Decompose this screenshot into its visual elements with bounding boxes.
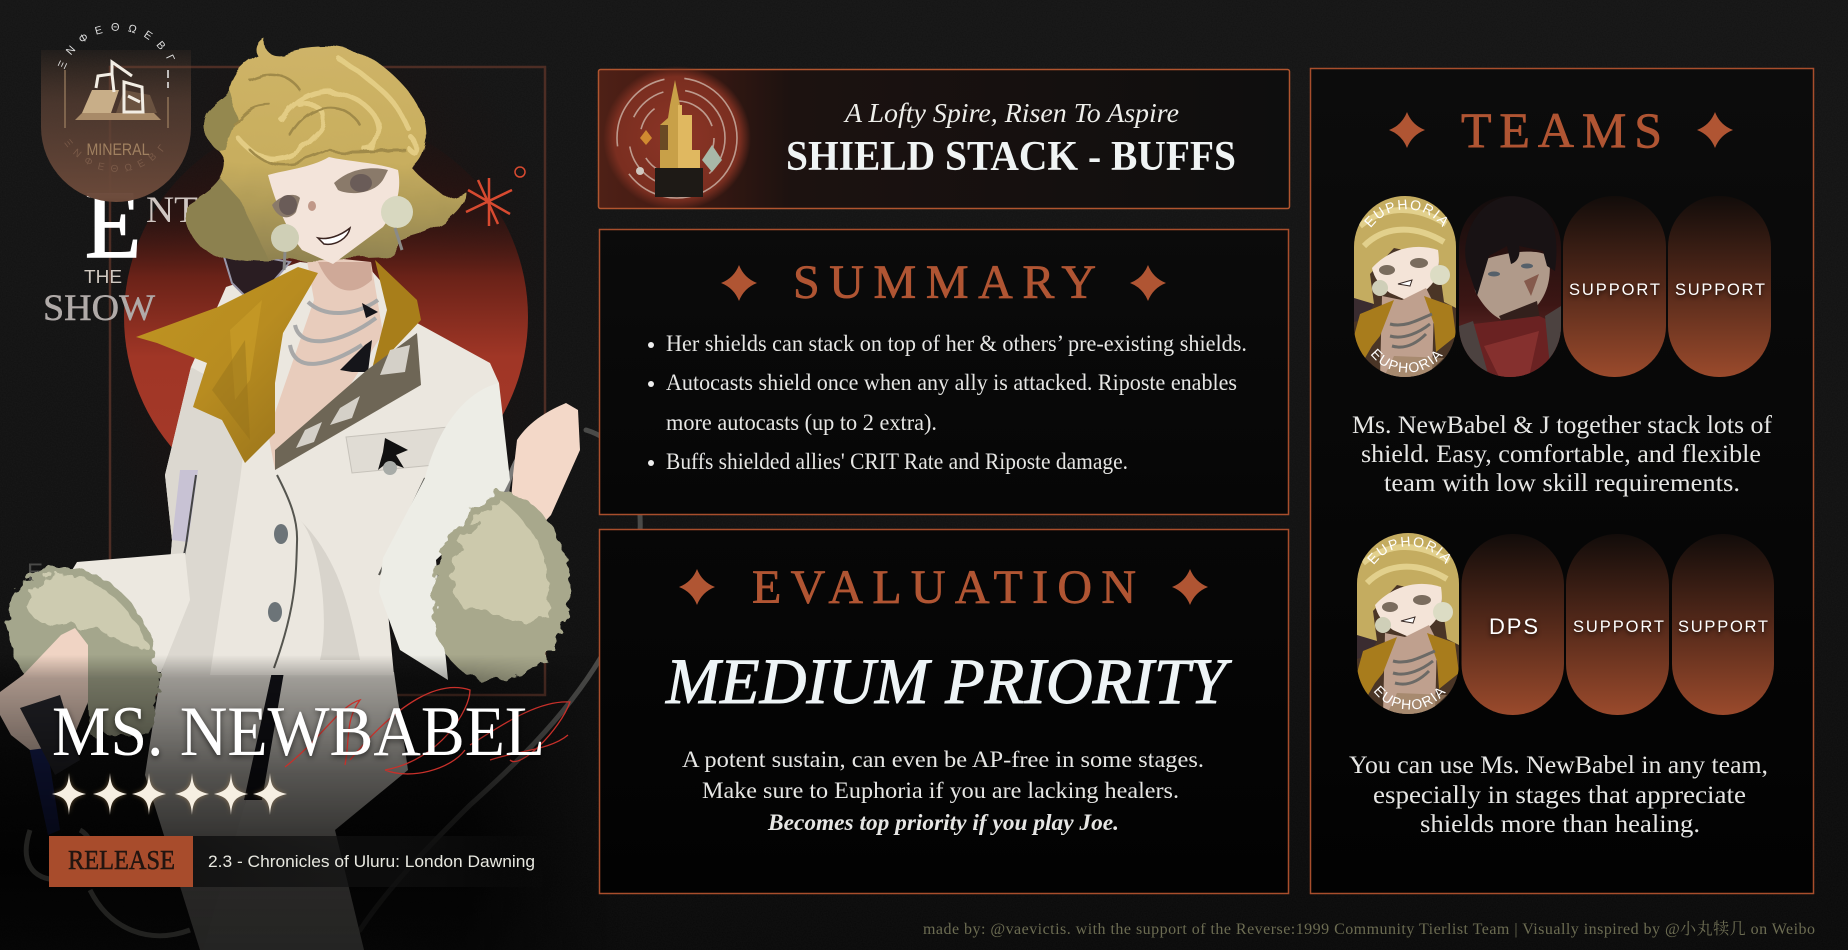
team 1 note: shield. Easy, comfortable, and flexible (1361, 441, 1761, 468)
release bar (49, 836, 553, 887)
gold scarf (136, 267, 318, 463)
team 2 note: especially in stages that appreciate (1373, 782, 1746, 809)
team 2 note: shields more than healing. (1420, 811, 1700, 838)
panel: summary (600, 230, 1288, 514)
black bow (222, 250, 290, 296)
summary bullets (648, 331, 1247, 474)
icon: mineral buildings (65, 62, 168, 128)
team 2 portrait: Ms. NewBabel euphoria: EUPHORIA (1374, 686, 1446, 710)
evaluation text: Make sure to Euphoria if you are lacking healers. (702, 778, 1179, 803)
patterned lapel (275, 333, 421, 470)
team 2 slot: support (1566, 534, 1669, 715)
lower fade overlay (0, 655, 620, 950)
team 2 slot: dps (1462, 534, 1564, 715)
icon: lofty spire (603, 66, 751, 210)
left fur cuff (8, 567, 157, 735)
panel: evaluation (600, 530, 1288, 894)
release bar: 2.3 - Chronicles of Uluru: London Dawning (208, 852, 535, 871)
badge label: MINERAL (86, 140, 150, 159)
pom earrings (271, 196, 413, 270)
hair (185, 38, 466, 262)
badge: bottom rune arc: ΞΝΦΕΘΩΕΒΓ (64, 139, 164, 172)
team 2 portrait: Ms. NewBabel euphoria: EUPHORIA (1367, 536, 1450, 564)
badge: top rune arc: ΞΝΦΕΘΩΕΒΓ (58, 23, 175, 70)
team 2 note: You can use Ms. NewBabel in any team, (1349, 752, 1768, 779)
coat seams and buttons (161, 475, 425, 670)
name signature flourish (285, 688, 570, 774)
banner title: SHIELD STACK - BUFFS (786, 134, 1236, 180)
panel: archetype banner (598, 66, 1290, 210)
badge: mineral afflatus (41, 23, 191, 202)
team 1 portrait: Ms. NewBabel euphoria: EUPHORIA (1364, 200, 1448, 228)
face (268, 157, 399, 264)
team 1 slot: support (1563, 196, 1666, 377)
right hand (509, 403, 580, 540)
summary bullets: Autocasts shield once when any ally is attacked. Riposte enables (666, 370, 1237, 395)
left hand (0, 628, 88, 750)
summary heading (721, 256, 1166, 309)
team 1 note (1352, 412, 1773, 497)
team 1 note: team with low skill requirements. (1384, 470, 1740, 497)
evaluation text: Becomes top priority if you play Joe. (767, 810, 1119, 835)
red asterisk ornament (466, 167, 525, 226)
banner subtitle: A Lofty Spire, Risen To Aspire (843, 98, 1179, 128)
summary bullets: Buffs shielded allies' CRIT Rate and Riposte damage. (666, 449, 1128, 474)
team 1 note: Ms. NewBabel & J together stack lots of (1352, 412, 1773, 439)
team 1 slot: support: SUPPORT (1569, 281, 1660, 299)
summary heading: SUMMARY (793, 256, 1096, 309)
panel: teams (1310, 68, 1814, 894)
team 1 slot: support (1668, 196, 1771, 377)
chest pocket (346, 427, 455, 475)
event logo title: enter the show: E (27, 559, 43, 586)
faint swirl marks (26, 830, 190, 936)
eyes and mouth (272, 168, 388, 244)
illustration: Ms. NewBabel (0, 38, 580, 950)
team 1 portrait: Ms. NewBabel euphoria (1354, 196, 1456, 377)
character name: MS. NEWBABEL (52, 693, 545, 771)
necklace (290, 300, 378, 372)
teams heading (1389, 102, 1733, 158)
team 1 slot: support: SUPPORT (1675, 281, 1765, 299)
left sleeve (60, 553, 190, 672)
right flared sleeve (379, 383, 510, 680)
event logo title: enter the show: NT (146, 190, 198, 231)
character backdrop: frame and red circle (110, 67, 545, 695)
evaluation text (682, 747, 1204, 835)
team 2 slot: support (1672, 534, 1774, 715)
teams heading: TEAMS (1461, 102, 1662, 158)
team 2 portrait: Ms. NewBabel euphoria (1357, 533, 1459, 714)
six star rarity (52, 773, 287, 815)
summary bullets: more autocasts (up to 2 extra). (666, 410, 937, 435)
release bar: RELEASE (68, 845, 175, 875)
right fur cuff (432, 492, 570, 680)
cord whip (360, 430, 640, 930)
event logo title: enter the show: SHOW (43, 288, 155, 329)
chest and neck (268, 255, 383, 470)
event logo title: enter the show: THE (84, 267, 122, 287)
event logo title: enter the show: E (85, 171, 141, 278)
event logo title: enter the show (27, 171, 198, 586)
priority rating: MEDIUM PRIORITY (665, 646, 1232, 718)
evaluation heading: EVALUATION (752, 561, 1136, 614)
coat body (161, 262, 499, 675)
team 2 note (1349, 752, 1768, 838)
coat lower panels (145, 672, 272, 950)
team 2 slot: dps: DPS (1489, 614, 1538, 639)
summary bullets: Her shields can stack on top of her & others’ pre-existing shields. (666, 331, 1247, 356)
team 2 slot: support: SUPPORT (1573, 618, 1664, 636)
team 2 slot: support: SUPPORT (1678, 618, 1768, 636)
evaluation text: A potent sustain, can even be AP-free in some stages. (682, 747, 1204, 772)
team 1 portrait: J (1459, 196, 1561, 377)
team 1 portrait: Ms. NewBabel euphoria: EUPHORIA (1370, 348, 1443, 372)
footer credits: made by: @vaevictis. with the support of the Reverse:1999 Community Tierlist Team | Visually inspired by @小丸犊几 on Weibo (923, 920, 1815, 938)
